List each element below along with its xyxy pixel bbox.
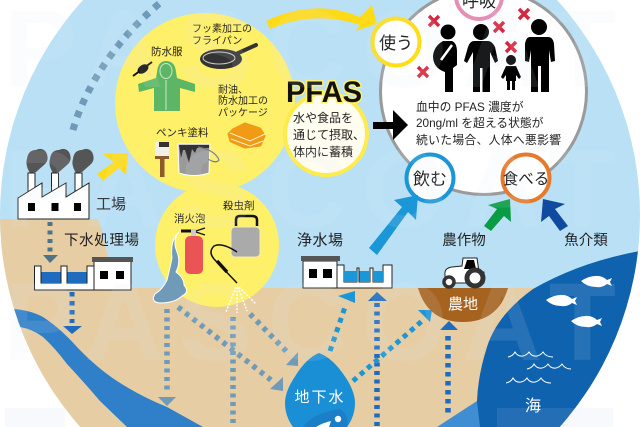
- factory label: 工場: [96, 196, 126, 213]
- farmland: [418, 288, 508, 322]
- chimneys: [28, 173, 82, 191]
- icon: paint bucket: [178, 144, 219, 176]
- icon: paint brush: [155, 142, 169, 177]
- yellow absorption area: [115, 13, 295, 307]
- windows: [28, 203, 81, 211]
- arrow: river to farmland: [440, 321, 458, 415]
- farmland: 農地: [448, 296, 478, 313]
- black arrow: [373, 110, 408, 140]
- arrow: products to use: [266, 5, 377, 31]
- arrow: spray down: [230, 317, 236, 427]
- PFAS description: [293, 111, 365, 159]
- watermark: PASCOAT: [4, 128, 616, 251]
- label: eat: [502, 154, 550, 202]
- red crosses: [418, 9, 529, 77]
- product labels: 消火泡: [174, 212, 206, 225]
- ground: [0, 219, 640, 427]
- health text: [416, 100, 561, 147]
- label: drink: 飲む: [413, 170, 447, 189]
- sea label: 海: [525, 397, 541, 415]
- arrow: water plant to drink: [369, 195, 418, 255]
- sewage treatment plant: [34, 257, 133, 290]
- arrow: foam down to river: [158, 309, 176, 406]
- health text: 20ng/ml を超える状態が: [416, 116, 544, 130]
- water purification plant label: 浄水場: [297, 232, 343, 249]
- product labels: フッ素加工の: [192, 22, 252, 35]
- product labels: 殺虫剤: [223, 199, 254, 212]
- pregnant woman: [433, 24, 457, 92]
- waves: [506, 352, 571, 383]
- label: use: 使う: [379, 33, 413, 53]
- label: drink: [406, 154, 454, 202]
- icon: pesticide sprayer: [211, 216, 260, 313]
- arrow: spray to groundwater: [250, 314, 298, 366]
- arrow: seafood to eat: [541, 199, 568, 231]
- icon: fire extinguisher: [181, 228, 205, 274]
- building: [18, 183, 89, 219]
- seafood label: 魚介類: [564, 232, 608, 249]
- arrow: factory to products: [97, 153, 128, 181]
- arrow: sewage to river: [63, 292, 82, 334]
- crops label: 農作物: [442, 232, 486, 249]
- PFAS circle: [285, 93, 367, 175]
- river: [13, 309, 203, 427]
- child: [501, 55, 521, 90]
- product labels: 防水服: [151, 45, 183, 58]
- fish: [546, 276, 612, 327]
- PFAS description: 水や食品を: [293, 111, 353, 125]
- icon: tractor: [444, 258, 484, 287]
- tall man: [525, 19, 555, 92]
- label: eat: 食べる: [503, 170, 549, 188]
- river mouth: [437, 401, 480, 427]
- factory: [18, 149, 94, 219]
- upper product circle: [115, 13, 295, 193]
- sea: [477, 251, 640, 427]
- water purification plant: [301, 256, 392, 288]
- product labels: ペンキ塗料: [156, 126, 209, 139]
- PFAS description: 体内に蓄積: [293, 144, 353, 159]
- product labels: パッケージ: [218, 107, 268, 119]
- arrow: factory to sewage: [43, 222, 58, 263]
- dotted arc to top: [73, 3, 160, 130]
- watermark: PASCOAT: [4, 261, 616, 384]
- product labels: フライパン: [192, 35, 242, 47]
- people: [433, 19, 555, 92]
- icon: raincoat: [138, 61, 195, 111]
- groundwater drop: [285, 353, 355, 427]
- arrow: groundwater to farmland: [353, 310, 432, 381]
- label: use: [372, 18, 420, 66]
- sewage plant label: 下水処理場: [64, 232, 139, 249]
- health impact circle: [380, 0, 586, 194]
- product labels: 防水加工の: [218, 94, 268, 107]
- arrow: groundwater to water plant: [330, 291, 355, 351]
- PFAS description: 通じて摂取、: [293, 127, 365, 142]
- smoke: [26, 149, 94, 173]
- groundwater drop: 地下水: [294, 389, 346, 406]
- icon: black mark near raincoat: [133, 62, 152, 76]
- arrow: river to water plant: [368, 292, 387, 427]
- health text: 血中の PFAS 濃度が: [416, 100, 524, 114]
- arrow: crops to eat: [484, 199, 511, 231]
- product labels: [151, 22, 268, 225]
- icon: frying pan: [200, 45, 256, 69]
- icon: orange package: [229, 124, 265, 147]
- arrow: foam to groundwater: [178, 307, 283, 391]
- product labels: 耐油、: [218, 83, 248, 96]
- PFAS heading: PFAS: [286, 76, 362, 109]
- health text: 続いた場合、人体へ悪影響: [416, 133, 561, 147]
- lower product circle: [155, 183, 279, 307]
- icon: foam spill: [153, 232, 187, 303]
- man: [464, 24, 498, 92]
- label: breathe: [456, 0, 502, 19]
